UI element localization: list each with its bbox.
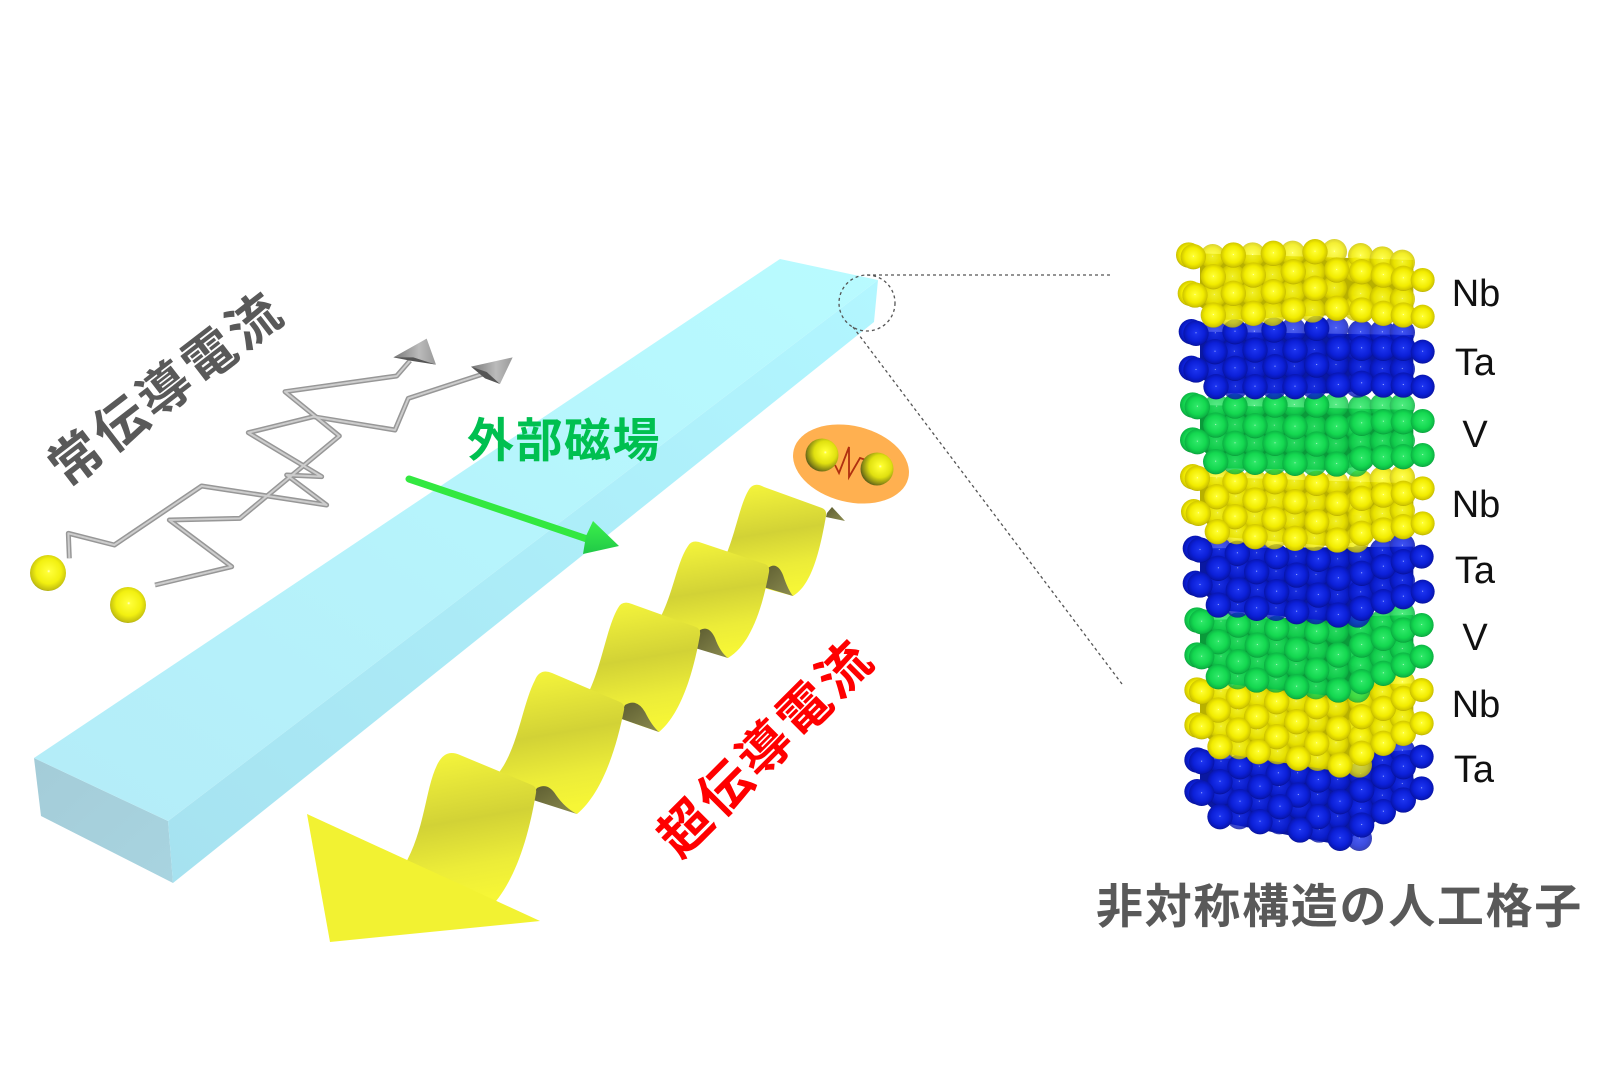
magnified area dotted circle and leader lines bbox=[839, 275, 1122, 684]
heading: normal conduction current: 常伝導電流 bbox=[39, 281, 296, 498]
heading: asymmetric artificial lattice: 非対称構造の人工格子 bbox=[1096, 880, 1583, 933]
layer: Ta 4 bbox=[1184, 738, 1434, 851]
heading: superconducting current: 超伝導電流 bbox=[647, 629, 886, 868]
chart: superconducting wave ribbon arrow bbox=[307, 485, 845, 942]
legend: layer element labels: Nb bbox=[1452, 684, 1500, 726]
upper lattice layers bbox=[1176, 239, 1435, 553]
legend: layer element labels: Ta bbox=[1454, 749, 1495, 791]
heading: external magnetic field: 外部磁場 bbox=[467, 414, 661, 467]
legend: layer element labels: Ta bbox=[1455, 550, 1496, 592]
layer: Nb 1 bbox=[1176, 239, 1435, 329]
layer: V 1 bbox=[1180, 392, 1435, 477]
legend: layer element labels: Ta bbox=[1455, 342, 1496, 384]
legend: layer element labels: V bbox=[1462, 414, 1488, 456]
icon: normal electrons bbox=[30, 555, 146, 623]
lower lattice layers bbox=[1183, 533, 1435, 851]
legend: layer element labels: Nb bbox=[1452, 484, 1500, 526]
panel: superconducting bar bbox=[34, 259, 878, 883]
legend: layer element labels bbox=[1452, 273, 1500, 791]
layer: Ta 3 bbox=[1183, 533, 1435, 628]
layer: V 2 bbox=[1184, 601, 1434, 703]
chart: scattered electron paths bbox=[68, 339, 513, 585]
layer: Nb 2 bbox=[1180, 464, 1435, 553]
layer: Nb 3 bbox=[1184, 670, 1434, 778]
icon: cooper pair bbox=[785, 413, 917, 515]
legend: layer element labels: V bbox=[1462, 617, 1488, 659]
chart: asymmetric superlattice atoms bbox=[1176, 239, 1435, 851]
legend: layer element labels: Nb bbox=[1452, 273, 1500, 315]
layer: Ta 1 bbox=[1179, 316, 1435, 399]
arrow: external magnetic field bbox=[409, 479, 619, 554]
